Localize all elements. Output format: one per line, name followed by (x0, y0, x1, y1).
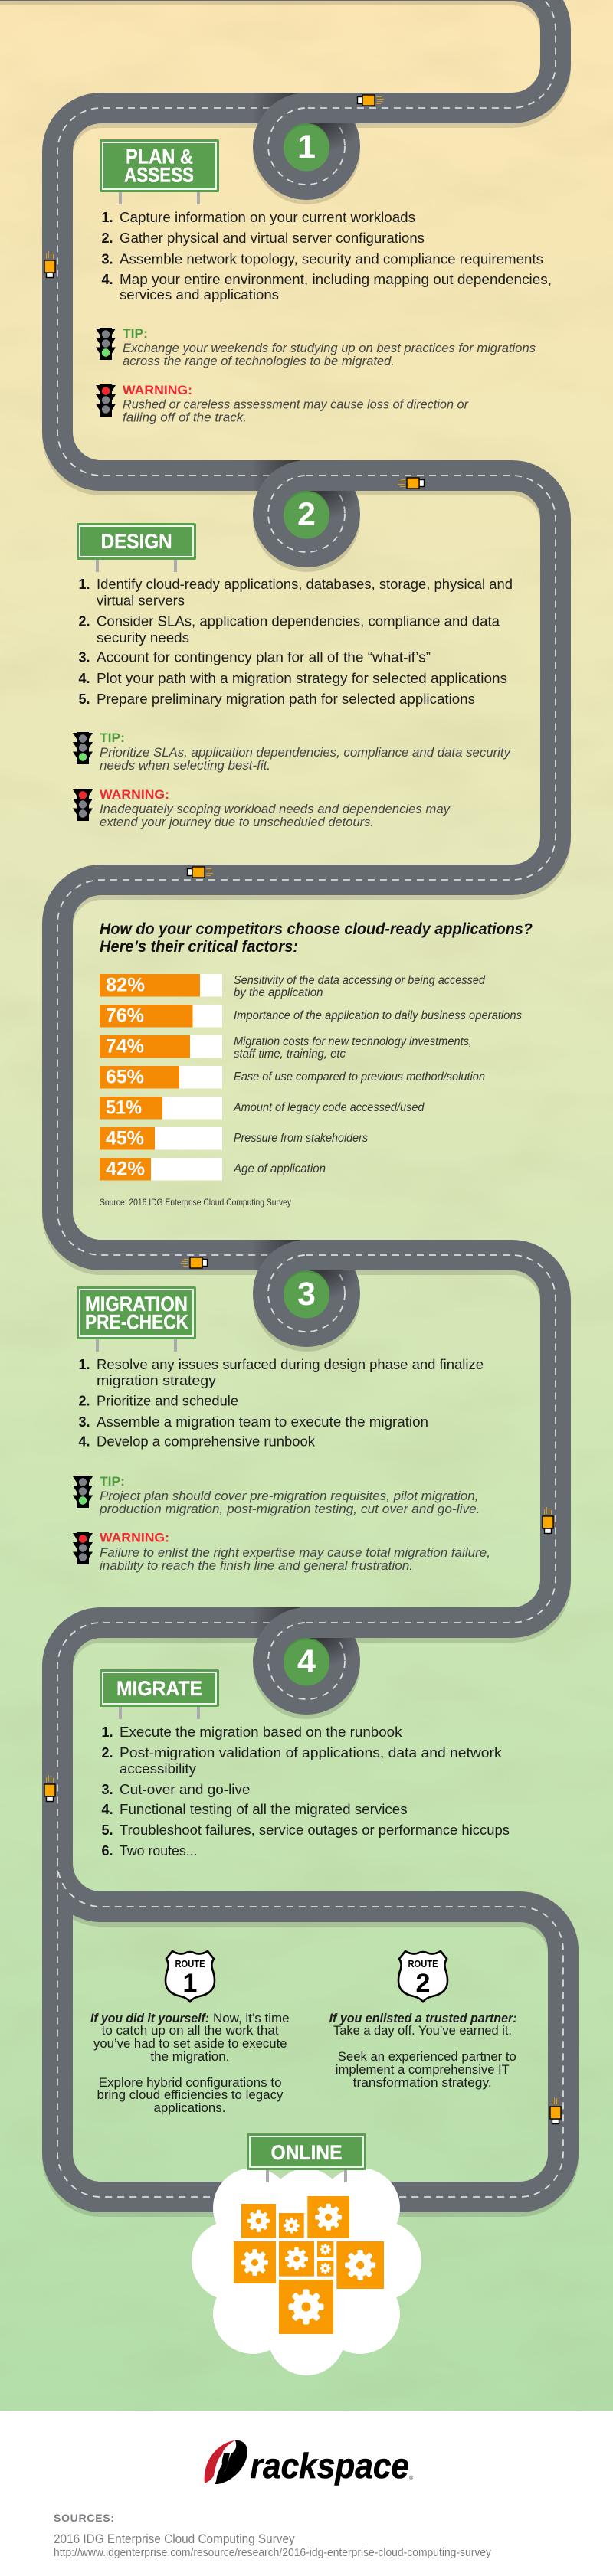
sign: plan and assess (100, 139, 219, 204)
numbered list: design: Plot your path with a migration strategy for selected applications (97, 671, 507, 686)
sources heading: SOURCES: (54, 2512, 114, 2524)
route 1 text: applications. (153, 2100, 225, 2115)
bar chart (100, 974, 222, 1181)
tip: design: Prioritize SLAs, application dependencies, compliance and data security (100, 746, 512, 760)
road: from loop 2 around to loop 3 (57, 476, 556, 1270)
bar chart: 45% (106, 1127, 144, 1149)
route 1 text (90, 2011, 290, 2115)
route 1 text: Now, it’s time (213, 2011, 290, 2025)
numbered list: design: Identify cloud-ready applications, databases, storage, physical and (97, 577, 513, 592)
numbered list: plan and assess: Assemble network topology, security and compliance requirements (120, 251, 543, 266)
numbered list: migrate: 1. (101, 1724, 113, 1740)
route 1 text: bring cloud efficiencies to legacy (97, 2087, 284, 2102)
route 1 text: If you did it yourself: (90, 2011, 209, 2025)
bar chart: 42% (106, 1158, 145, 1179)
numbered list: migrate (101, 1724, 510, 1858)
icon: route 1 shield: ROUTE (175, 1958, 205, 1970)
numbered list: design: 4. (78, 671, 90, 686)
tip: migration pre-check (73, 1474, 480, 1516)
tip: migration pre-check: production migration, post-migration testing, cut over and go-live. (99, 1502, 480, 1516)
bar labels: Age of application (233, 1162, 326, 1175)
warning: design (73, 787, 451, 829)
warning: plan and assess: falling off of the track. (123, 410, 247, 424)
tip: design: needs when selecting best-fit. (100, 759, 270, 773)
warning: plan and assess (96, 383, 469, 424)
numbered list: design (78, 577, 513, 707)
cars on the road (44, 95, 561, 2124)
sign: plan and assess: ASSESS (124, 164, 194, 187)
route 2 text: If you enlisted a trusted partner: (329, 2011, 517, 2025)
road loop with step number 4: 4 (297, 1643, 316, 1680)
chart heading (100, 920, 533, 956)
numbered list: migration pre-check: Develop a comprehensive runbook (97, 1433, 316, 1449)
warning: design: extend your journey due to unscheduled detours. (100, 816, 374, 829)
numbered list: migrate: 5. (101, 1822, 113, 1838)
warning: migration pre-check: Failure to enlist the right expertise may cause total migration failure, (100, 1546, 490, 1560)
bar labels: Sensitivity of the data accessing or being accessed (234, 974, 486, 987)
sign: migration pre-check: MIGRATION (85, 1293, 188, 1316)
bar chart: 74% (106, 1035, 144, 1057)
road loop with step number 2 (253, 460, 360, 567)
cloud destination (192, 2133, 421, 2375)
road loop with step number 1 (253, 93, 360, 200)
route 2 (329, 1951, 517, 2090)
numbered list: design: 1. (78, 577, 90, 592)
bar labels: staff time, training, etc (234, 1048, 346, 1061)
route 2 text: transformation strategy. (353, 2075, 492, 2090)
route 1 text: to catch up on all the work that (102, 2023, 279, 2038)
sign: migration pre-check (77, 1286, 196, 1352)
numbered list: migration pre-check: migration strategy (97, 1373, 216, 1388)
panel: migrate (90, 1669, 517, 2115)
numbered list: design: Consider SLAs, application dependencies, compliance and data (97, 614, 500, 629)
numbered list: migration pre-check: Assemble a migration team to execute the migration (97, 1414, 428, 1430)
bar chart: 76% (106, 1005, 144, 1026)
bar labels: Importance of the application to daily business operations (234, 1009, 522, 1022)
sign: migration pre-check: PRE-CHECK (85, 1311, 188, 1334)
footer background (0, 2411, 613, 2576)
bar chart: 82% (106, 974, 145, 995)
numbered list: design: Account for contingency plan for all of the “what-if’s” (97, 649, 431, 665)
bar labels: by the application (234, 986, 323, 999)
numbered list: plan and assess (101, 210, 552, 302)
numbered list: plan and assess: 1. (101, 210, 113, 225)
tip: design (73, 731, 512, 773)
chart heading: Here’s their critical factors: (100, 938, 298, 956)
route 1 text: the migration. (150, 2049, 229, 2064)
numbered list: plan and assess: Map your entire environment, including mapping out dependencies, (120, 272, 552, 287)
panel: migration pre-check (73, 1286, 490, 1573)
numbered list: migration pre-check: 3. (78, 1414, 90, 1430)
icon: route 1 shield (166, 1951, 215, 2002)
route 1 text: you’ve had to set aside to execute (93, 2036, 287, 2051)
bar labels: Pressure from stakeholders (234, 1132, 368, 1145)
chart heading: How do your competitors choose cloud-ready applications? (100, 920, 533, 938)
road loop with step number 4 (253, 1607, 360, 1715)
logo: rackspace (205, 2440, 414, 2486)
tip: plan and assess: TIP: (123, 326, 148, 341)
numbered list: design: 2. (78, 614, 90, 629)
bar chart: 51% (106, 1097, 142, 1118)
panel: plan and assess (96, 139, 552, 424)
sign: migrate: MIGRATE (116, 1677, 202, 1700)
icon: route 2 shield: 2 (416, 1969, 430, 1998)
road loop with step number 1: 1 (297, 129, 316, 165)
warning: plan and assess: Rushed or careless assessment may cause loss of direction or (123, 398, 469, 412)
sources (54, 2512, 491, 2559)
numbered list: migration pre-check: Prioritize and schedule (97, 1394, 238, 1409)
chart source: Source: 2016 IDG Enterprise Cloud Computing Survey (100, 1197, 291, 1208)
warning: design: Inadequately scoping workload needs and dependencies may (100, 803, 451, 816)
numbered list: migration pre-check: Resolve any issues surfaced during design phase and finalize (97, 1357, 484, 1372)
route 2 text (329, 2011, 517, 2090)
tip: migration pre-check: Project plan should cover pre-migration requisites, pilot migration, (100, 1489, 478, 1503)
warning: migration pre-check: inability to reach the finish line and general frustration. (100, 1559, 413, 1573)
numbered list: plan and assess: 3. (101, 251, 113, 266)
numbered list: migrate: Execute the migration based on the runbook (120, 1724, 403, 1740)
numbered list: migrate: accessibility (120, 1761, 196, 1777)
icon: route 1 shield: 1 (183, 1969, 197, 1998)
sign: design: DESIGN (101, 530, 172, 553)
numbered list: migrate: 6. (101, 1843, 113, 1858)
panel: design (73, 523, 513, 829)
numbered list: design: 5. (78, 691, 90, 707)
numbered list: plan and assess: Capture information on your current workloads (120, 210, 415, 225)
sign: design (77, 523, 196, 572)
numbered list: migrate: 2. (101, 1745, 113, 1760)
icon: route 2 shield: ROUTE (408, 1958, 438, 1970)
sign: migrate (100, 1669, 219, 1719)
numbered list: design: virtual servers (97, 593, 185, 608)
bar labels: Ease of use compared to previous method/solution (234, 1071, 485, 1084)
numbered list: migrate: 4. (101, 1802, 113, 1817)
sign: online (247, 2133, 366, 2182)
source url: http://www.idgenterprise.com/resource/research/2016-idg-enterprise-cloud-computing-survey (54, 2546, 491, 2559)
icon: rackspace figure (205, 2440, 247, 2484)
road shadow (0, 0, 563, 2202)
numbered list: migration pre-check: 2. (78, 1394, 90, 1409)
bar labels: Amount of legacy code accessed/used (233, 1101, 425, 1114)
numbered list: design: 3. (78, 649, 90, 665)
numbered list: migration pre-check: 1. (78, 1357, 90, 1372)
road: from loop 4 along the two routes (57, 1607, 563, 2197)
tip: migration pre-check: TIP: (100, 1474, 125, 1489)
warning: migration pre-check: WARNING: (100, 1530, 169, 1545)
route 2 text: implement a comprehensive IT (336, 2062, 510, 2077)
route 1 (90, 1951, 290, 2115)
warning: migration pre-check (73, 1530, 490, 1573)
wordmark: rackspace (250, 2446, 409, 2486)
bar labels: Migration costs for new technology investments, (234, 1035, 472, 1048)
road: from loop 3 to loop 4 (306, 1255, 556, 1623)
numbered list: plan and assess: 4. (101, 272, 113, 287)
sign: online: ONLINE (271, 2141, 342, 2164)
route 2 text: Take a day off. You’ve earned it. (333, 2023, 512, 2038)
numbered list: migrate: Cut-over and go-live (120, 1782, 250, 1797)
tip: plan and assess: across the range of technologies to be migrated. (123, 355, 395, 368)
road loop with step number 3 (253, 1240, 360, 1347)
source title: 2016 IDG Enterprise Cloud Computing Survey (54, 2532, 295, 2546)
numbered list: migrate: Post-migration validation of applications, data and network (120, 1745, 503, 1760)
tip: design: TIP: (100, 731, 125, 745)
road loop with step number 3: 3 (297, 1276, 316, 1313)
route 2 text: Seek an experienced partner to (338, 2049, 516, 2064)
warning: plan and assess: WARNING: (123, 383, 192, 397)
panel: critical factors chart (100, 920, 533, 1208)
numbered list: migrate: Two routes... (120, 1843, 198, 1858)
numbered list: design: Prepare preliminary migration path for selected applications (97, 691, 475, 707)
route 1 text: Explore hybrid configurations to (99, 2075, 282, 2090)
application gear tiles (234, 2196, 384, 2334)
numbered list: migrate: 3. (101, 1782, 113, 1797)
warning: design: WARNING: (100, 787, 169, 802)
numbered list: migrate: Functional testing of all the migrated services (120, 1802, 408, 1817)
icon: route 2 shield (398, 1951, 447, 2002)
numbered list: migration pre-check: 4. (78, 1433, 90, 1449)
tip: plan and assess: Exchange your weekends for studying up on best practices for migrations (123, 342, 536, 355)
bar chart: 65% (106, 1066, 144, 1087)
numbered list: plan and assess: services and applications (120, 287, 279, 302)
sign: plan and assess: PLAN & (126, 145, 193, 168)
road loop with step number 2: 2 (297, 496, 316, 533)
road: entry from the top of the page (0, 0, 556, 108)
numbered list: migration pre-check (78, 1357, 484, 1449)
bar labels (233, 974, 522, 1175)
road: from loop 1 around to loop 2 (57, 93, 306, 491)
registered mark: ® (409, 2475, 414, 2481)
numbered list: plan and assess: Gather physical and virtual server configurations (120, 230, 425, 246)
cloud shape (192, 2168, 421, 2375)
numbered list: design: security needs (97, 630, 189, 646)
numbered list: migrate: Troubleshoot failures, service outages or performance hiccups (120, 1822, 510, 1838)
tip: plan and assess (96, 326, 536, 368)
numbered list: plan and assess: 2. (101, 230, 113, 246)
